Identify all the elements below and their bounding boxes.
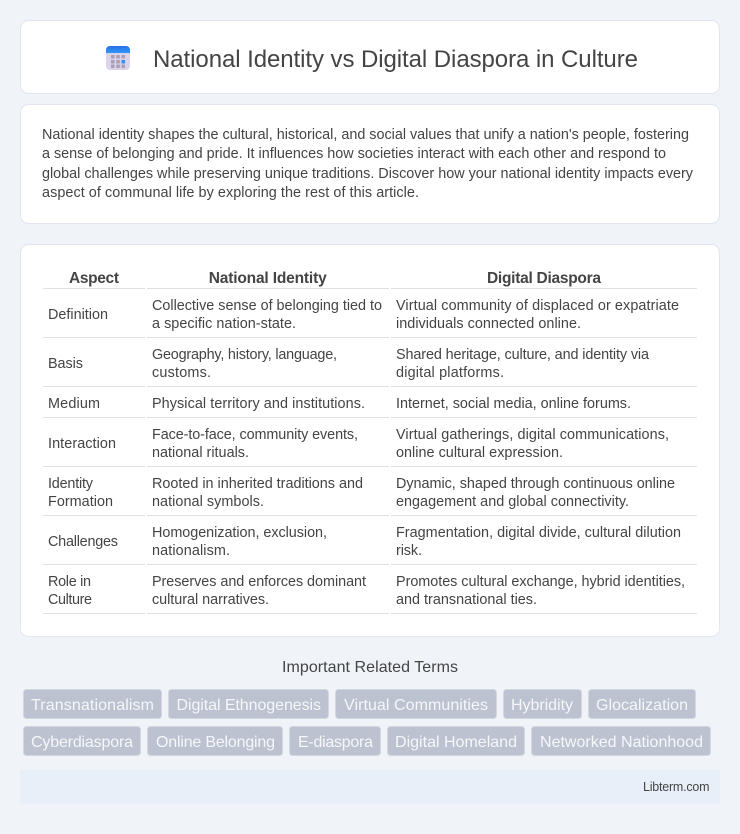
row: Interaction: Face-to-face, community events, bbox=[152, 427, 358, 443]
tag: Digital Ethnogenesis: Digital Ethnogenesis bbox=[176, 697, 321, 714]
row: Basis: customs. bbox=[152, 365, 211, 381]
tag: Online Belonging bbox=[148, 726, 282, 756]
comparison table card bbox=[20, 244, 720, 636]
intro card bbox=[20, 104, 720, 224]
row: Challenges: Homogenization, exclusion, bbox=[152, 525, 327, 541]
title: National Identity vs Digital Diaspora in Culture bbox=[153, 46, 638, 73]
row: Challenges: Fragmentation, digital divide, cultural dilution bbox=[396, 525, 681, 541]
row: Role in Culture bbox=[48, 574, 685, 608]
row: Interaction: Virtual gatherings, digital communications, bbox=[396, 427, 669, 443]
row: Role in Culture: cultural narratives. bbox=[152, 592, 269, 608]
intro paragraph bbox=[42, 127, 694, 201]
table header row: Digital Diaspora bbox=[487, 270, 601, 287]
intro paragraph: National identity shapes the cultural, historical, and social values that unify a nation's people, fostering bbox=[42, 127, 689, 143]
tag: Hybridity: Hybridity bbox=[511, 697, 573, 714]
row: Definition bbox=[48, 298, 679, 332]
row: Challenges: nationalism. bbox=[152, 543, 230, 559]
row: Challenges: Challenges bbox=[48, 534, 118, 550]
tag: Networked Nationhood bbox=[532, 726, 710, 756]
related terms heading: Important Related Terms bbox=[282, 659, 458, 676]
tag: Networked Nationhood: Networked Nationhood bbox=[540, 734, 703, 751]
row: Basis: digital platforms. bbox=[396, 365, 504, 381]
row: Medium bbox=[48, 396, 631, 412]
row: Basis: Shared heritage, culture, and identity via bbox=[396, 347, 649, 363]
row: Interaction: online cultural expression. bbox=[396, 445, 563, 461]
row: Challenges bbox=[48, 525, 681, 559]
tag: Hybridity bbox=[504, 690, 582, 718]
row: Basis bbox=[48, 347, 649, 381]
intro paragraph: aspect of communal life by exploring the rest of this article. bbox=[42, 185, 419, 201]
row: Identity Formation: Dynamic, shaped through continuous online bbox=[396, 476, 675, 492]
intro paragraph: a sense of belonging and pride. It influences how societies interact with each other and respond to bbox=[42, 146, 666, 162]
row: Definition: Collective sense of belonging tied to bbox=[152, 298, 382, 314]
tag: Virtual Communities bbox=[336, 690, 496, 718]
row: Interaction: national rituals. bbox=[152, 445, 249, 461]
footer credit: Libterm.com bbox=[643, 780, 710, 794]
row: Definition: Definition bbox=[48, 307, 108, 323]
tag: Digital Homeland: Digital Homeland bbox=[395, 734, 517, 751]
tag: Digital Homeland bbox=[388, 726, 524, 756]
table header row bbox=[69, 270, 601, 287]
row: Identity Formation: Rooted in inherited traditions and bbox=[152, 476, 363, 492]
row: Identity Formation: Formation bbox=[48, 494, 113, 510]
row: Definition: individuals connected online. bbox=[396, 316, 581, 332]
title card bbox=[20, 20, 720, 94]
tag: Transnationalism bbox=[24, 690, 162, 718]
intro paragraph: global challenges while preserving unique traditions. Discover how your national identity impacts every bbox=[42, 166, 694, 182]
row: Role in Culture: Role in bbox=[48, 574, 91, 590]
row: Identity Formation: engagement and global connectivity. bbox=[396, 494, 629, 510]
row: Medium: Medium bbox=[48, 396, 100, 412]
tag: Digital Ethnogenesis bbox=[168, 690, 328, 718]
row: Role in Culture: and transnational ties. bbox=[396, 592, 537, 608]
row: Role in Culture: Culture bbox=[48, 592, 92, 608]
tags bbox=[24, 690, 710, 756]
tag: Virtual Communities: Virtual Communities bbox=[344, 697, 488, 714]
row: Identity Formation bbox=[48, 476, 675, 510]
row: Role in Culture: Promotes cultural exchange, hybrid identities, bbox=[396, 574, 685, 590]
tag: Cyberdiaspora: Cyberdiaspora bbox=[31, 734, 133, 751]
row: Medium: Physical territory and institutions. bbox=[152, 396, 365, 412]
row: Identity Formation: national symbols. bbox=[152, 494, 264, 510]
row: Identity Formation: Identity bbox=[48, 476, 94, 492]
tag: E-diaspora bbox=[290, 726, 380, 756]
row: Basis: Geography, history, language, bbox=[152, 347, 337, 363]
table header row: Aspect bbox=[69, 270, 119, 287]
tag: Online Belonging: Online Belonging bbox=[156, 734, 275, 751]
row: Role in Culture: Preserves and enforces dominant bbox=[152, 574, 366, 590]
tag: Transnationalism: Transnationalism bbox=[31, 697, 154, 714]
tag: Cyberdiaspora bbox=[24, 726, 140, 756]
tag: Glocalization: Glocalization bbox=[596, 697, 688, 714]
row: Definition: a specific nation-state. bbox=[152, 316, 296, 332]
row: Basis: Basis bbox=[48, 356, 83, 372]
row: Interaction: Interaction bbox=[48, 436, 116, 452]
row: Definition: Virtual community of displaced or expatriate bbox=[396, 298, 679, 314]
tag: E-diaspora: E-diaspora bbox=[298, 734, 373, 751]
row: Medium: Internet, social media, online forums. bbox=[396, 396, 631, 412]
icon: calendar bbox=[106, 46, 130, 70]
row: Challenges: risk. bbox=[396, 543, 422, 559]
footer bbox=[20, 770, 720, 804]
tag: Glocalization bbox=[588, 690, 696, 718]
table header row: National Identity bbox=[209, 270, 327, 287]
row: Interaction bbox=[48, 427, 669, 461]
